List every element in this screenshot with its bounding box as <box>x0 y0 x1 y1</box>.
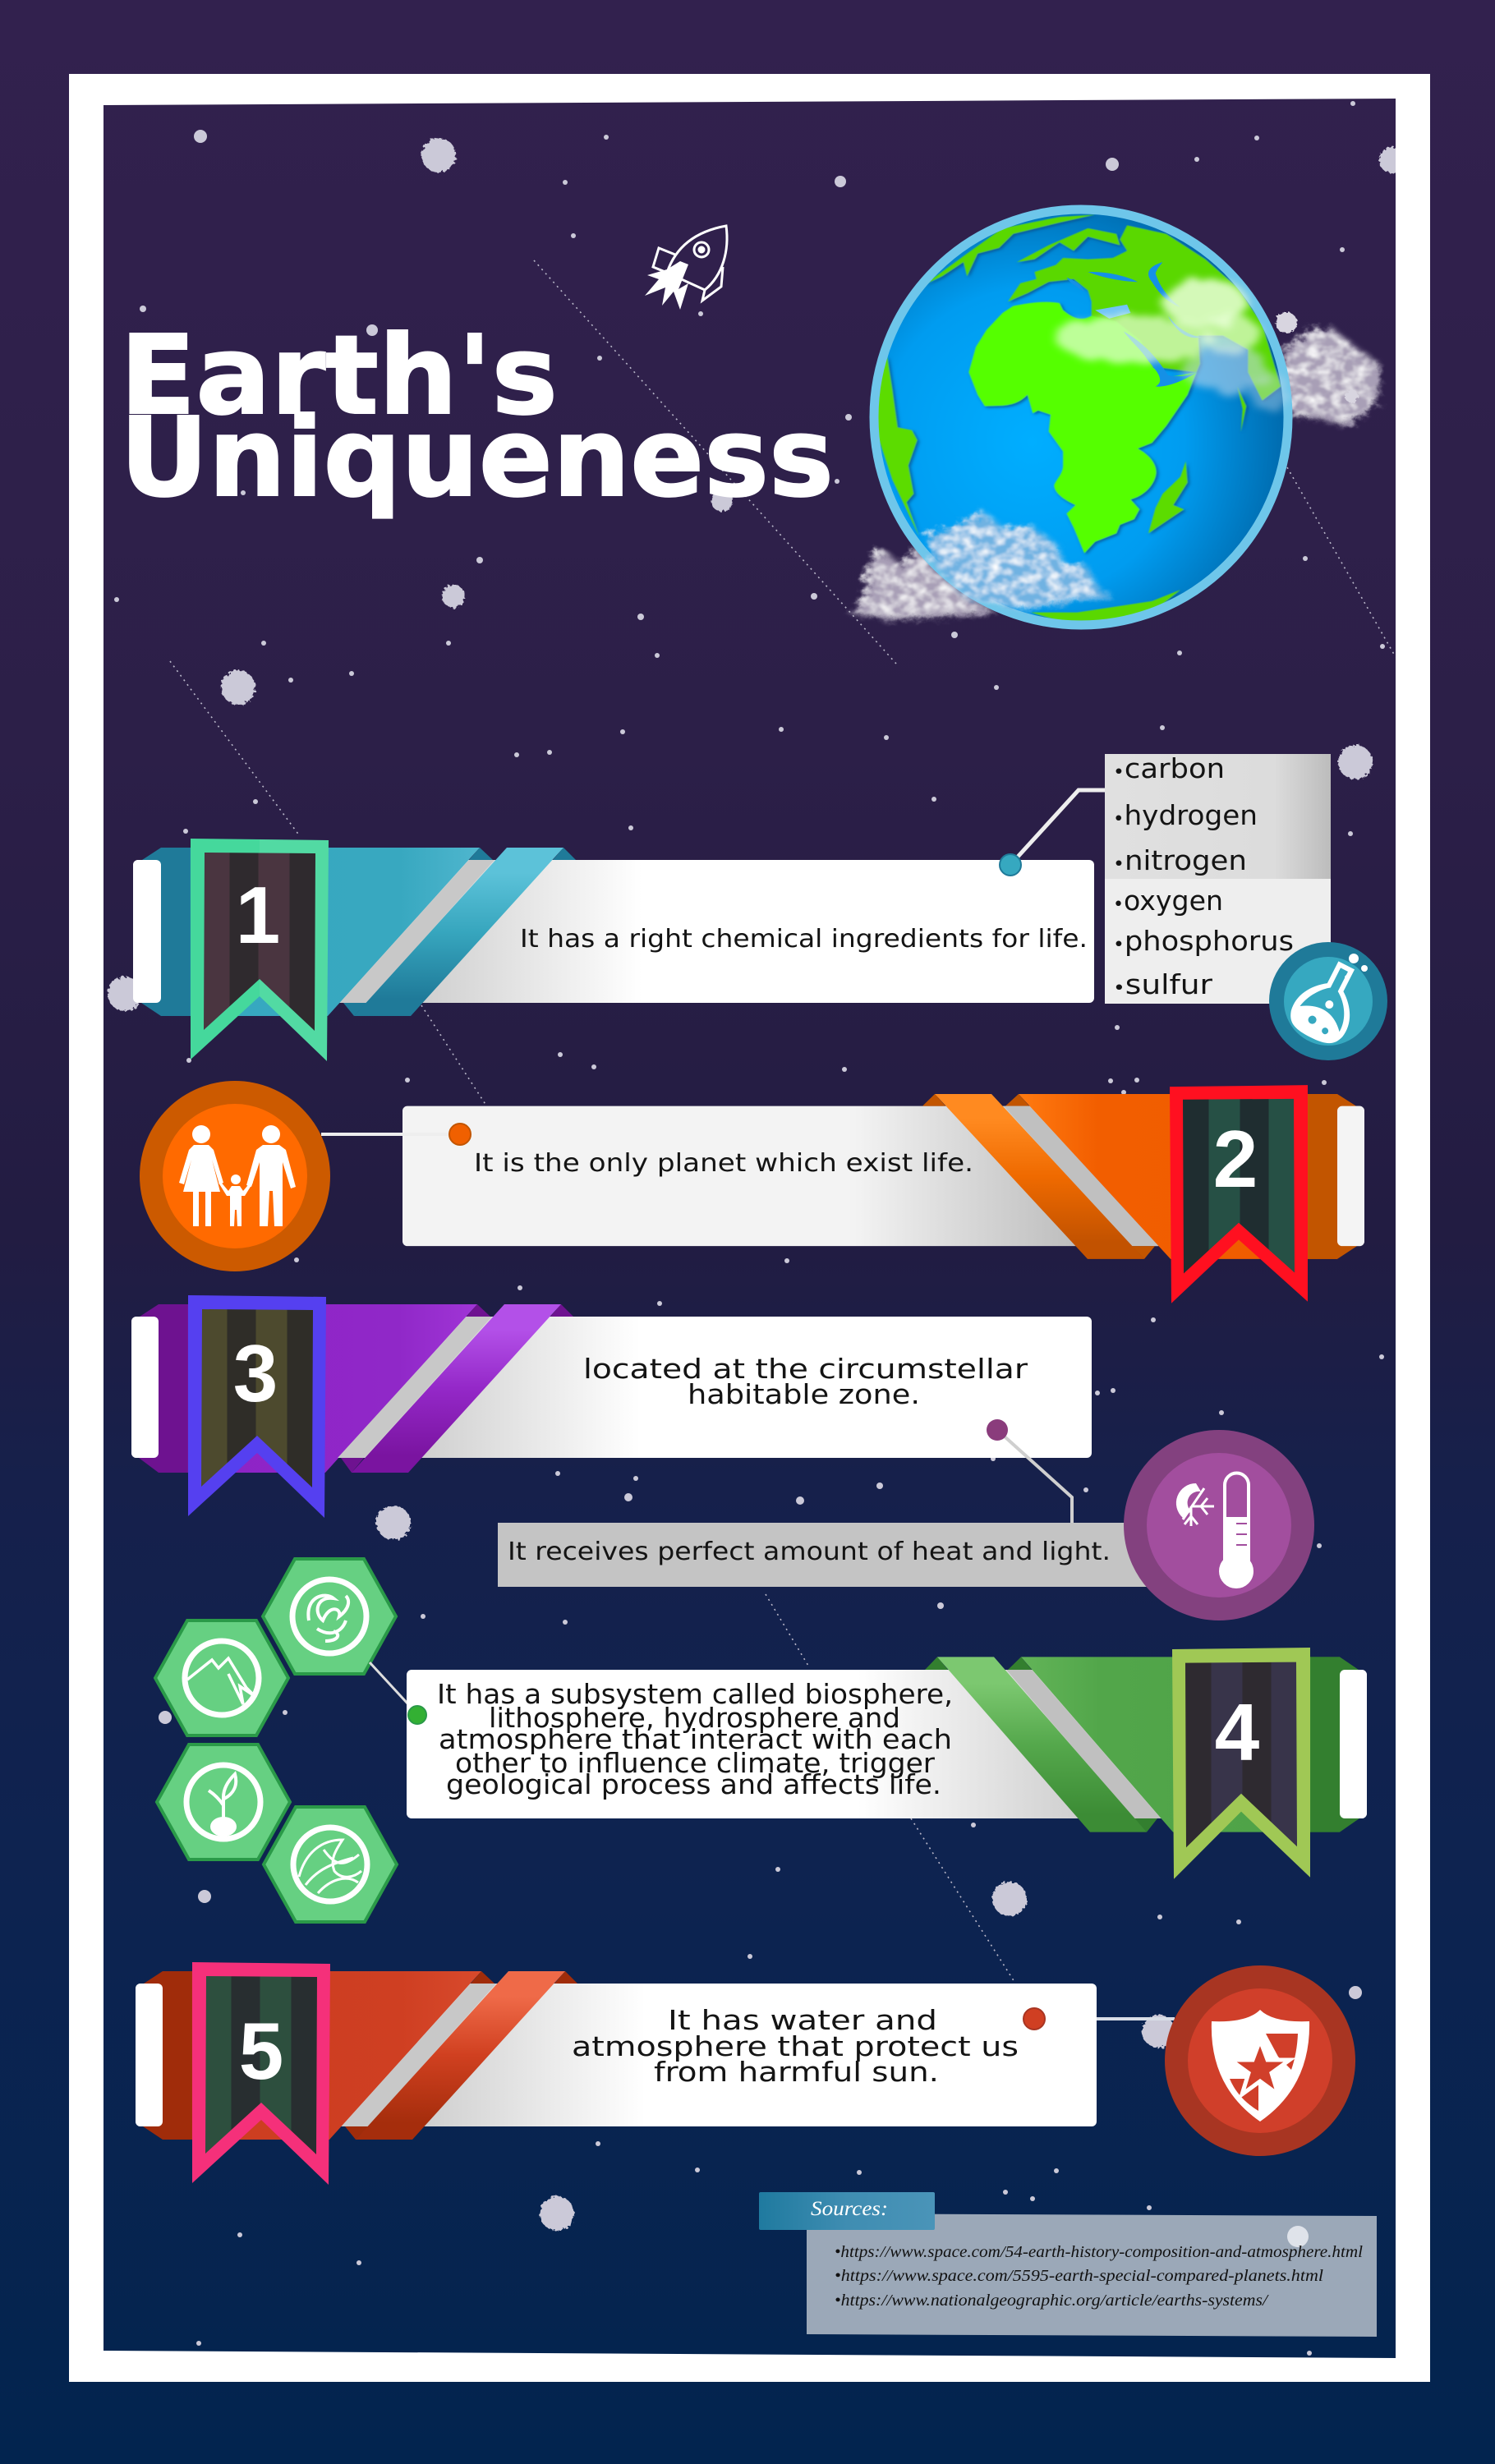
connector 2 <box>321 1124 471 1145</box>
text 1: It has a right chemical ingredients for life. <box>520 925 1088 954</box>
hexagon: atmosphere <box>263 1559 396 1674</box>
connector 4 <box>370 1662 408 1704</box>
icon: family <box>140 1081 330 1271</box>
bookmark 5 <box>192 1962 330 2185</box>
element list: •carbon <box>1113 752 1225 784</box>
ribbon 2 <box>922 1094 1364 1259</box>
bookmark 4 <box>1172 1648 1310 1879</box>
panel 1 <box>133 860 1094 1003</box>
element list: •nitrogen <box>1113 844 1247 876</box>
continents <box>875 214 1281 621</box>
icon: flask <box>1269 942 1387 1060</box>
text 4 <box>437 1678 953 1800</box>
text 5: atmosphere that protect us <box>572 2030 1019 2062</box>
connector 5 <box>1024 2008 1175 2030</box>
panel 2 <box>402 1106 1364 1246</box>
banner 5 <box>136 1962 1097 2185</box>
element list <box>1105 752 1331 1004</box>
banner 3 <box>131 1295 1092 1518</box>
ribbon 4 <box>925 1657 1367 1832</box>
splats over clouds <box>1276 312 1358 402</box>
heat and light box: It receives perfect amount of heat and light. <box>508 1538 1111 1566</box>
title: Uniqueness <box>120 395 834 522</box>
text 2: It is the only planet which exist life. <box>474 1149 973 1178</box>
icon: thermometer <box>1124 1430 1314 1620</box>
bookmark 3 <box>188 1295 326 1518</box>
bookmark 1 <box>191 839 329 1061</box>
hexagon: lithosphere <box>155 1620 288 1735</box>
ribbon 5 <box>136 1971 577 2140</box>
earth atmosphere ring <box>874 209 1288 625</box>
element list: •oxygen <box>1113 885 1223 917</box>
text 4: lithosphere, hydrosphere and <box>489 1702 900 1734</box>
ribbon 3 <box>131 1304 573 1473</box>
text 3: located at the circumstellar <box>583 1353 1028 1385</box>
icon: shield <box>1165 1965 1355 2156</box>
bookmark 5: 5 <box>239 2006 283 2096</box>
text 5 <box>572 2004 1019 2088</box>
banner 1 <box>133 839 1094 1061</box>
hexagon: hydrosphere <box>264 1807 397 1922</box>
sources box: •https://www.nationalgeographic.org/article/earths-systems/ <box>835 2292 1270 2310</box>
seas and channels <box>1066 262 1202 387</box>
connector 3 <box>987 1419 1072 1523</box>
element list: •phosphorus <box>1113 925 1294 957</box>
text 4: atmosphere that interact with each <box>439 1723 952 1755</box>
earth globe <box>874 209 1288 625</box>
sources tab: Sources: <box>811 2198 888 2220</box>
ribbon 1 <box>133 848 576 1016</box>
sources box: •https://www.space.com/5595-earth-special-compared-planets.html <box>835 2267 1323 2285</box>
text 5: It has water and <box>668 2004 937 2036</box>
number 4: 4 <box>1215 1687 1259 1777</box>
text 4: It has a subsystem called biosphere, <box>437 1678 953 1710</box>
sources box <box>807 2213 1377 2337</box>
sources box: •https://www.space.com/54-earth-history-composition-and-atmosphere.html <box>835 2243 1363 2261</box>
text 3: habitable zone. <box>688 1378 920 1410</box>
heat and light box <box>498 1523 1155 1587</box>
number 2: 2 <box>1213 1114 1258 1204</box>
pale clouds on earth <box>1056 279 1289 411</box>
sources tab <box>759 2192 935 2230</box>
dot 4 <box>408 1706 426 1724</box>
bookmark 2 <box>1170 1085 1308 1303</box>
connector 1 <box>1000 790 1105 876</box>
text 5: from harmful sun. <box>654 2056 939 2088</box>
grey clouds behind earth <box>849 327 1380 619</box>
hexagon: biosphere <box>157 1745 290 1859</box>
banner 2 <box>402 1085 1364 1303</box>
panel 4 <box>407 1670 1367 1818</box>
text 3 <box>583 1353 1028 1410</box>
shooting star trails <box>170 260 1396 1982</box>
bookmark 3: 3 <box>233 1328 278 1418</box>
title: Earth's <box>120 313 558 439</box>
banner 4 <box>407 1648 1367 1879</box>
ink splat stars <box>108 138 1405 2231</box>
panel 5 <box>136 1984 1097 2126</box>
icon: rocket <box>645 226 727 310</box>
star field <box>114 101 1385 2356</box>
element list: •sulfur <box>1113 968 1212 1000</box>
text 4: other to influence climate, trigger <box>455 1747 935 1779</box>
text 4: geological process and affects life. <box>446 1768 941 1800</box>
title <box>120 313 834 522</box>
blue-white cloud at earth base <box>926 511 1113 609</box>
panel 3 <box>131 1317 1092 1458</box>
bookmark 1: 1 <box>236 870 280 960</box>
element list: •hydrogen <box>1113 799 1258 831</box>
